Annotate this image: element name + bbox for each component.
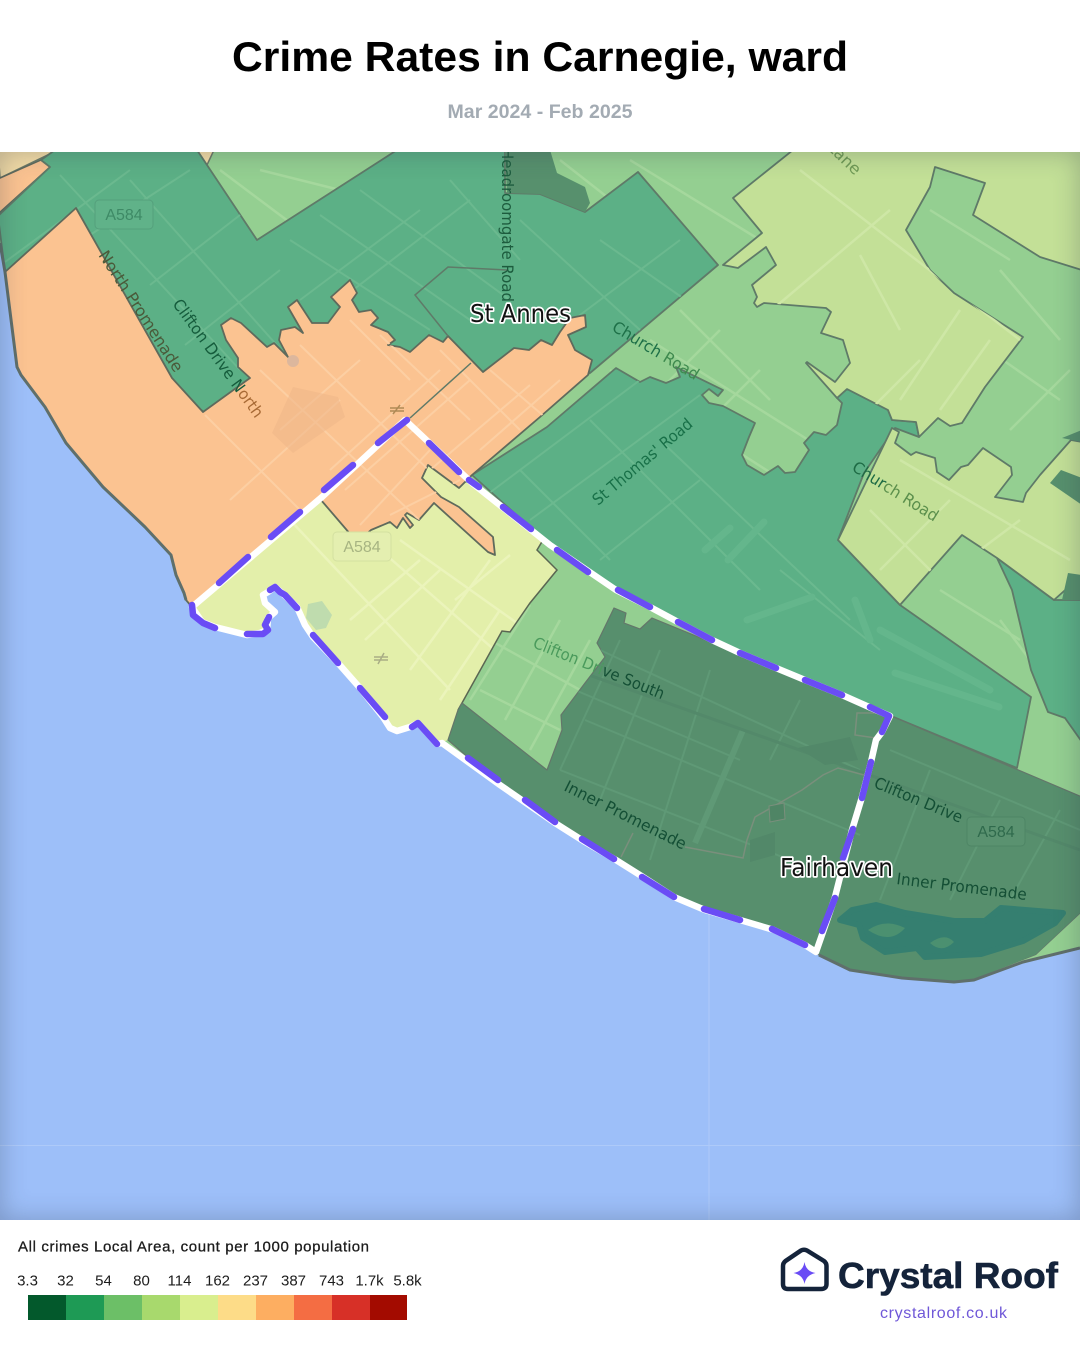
area: ward pale yellow bbox=[192, 465, 557, 744]
coastline bbox=[0, 243, 1080, 982]
lake islands bbox=[868, 923, 954, 948]
icon: house with star bbox=[783, 1250, 826, 1289]
shield: A584 north: A584 bbox=[105, 207, 143, 224]
label: Inner Promenade east: Inner Promenade bbox=[896, 869, 1028, 904]
legend scale numbers: 80 bbox=[133, 1272, 150, 1290]
shield: A584 east bbox=[967, 817, 1025, 846]
shield: A584 ward: A584 bbox=[343, 539, 381, 556]
legend title: All crimes Local Area, count per 1000 population bbox=[18, 1238, 369, 1256]
label: Clifton Drive North: Clifton Drive North bbox=[169, 295, 268, 421]
logo: Crystal Roof bbox=[783, 1250, 1059, 1322]
area: Fairhaven dark green bbox=[448, 608, 1080, 982]
legend scale numbers: 1.7k bbox=[355, 1272, 384, 1290]
area: north mid green bbox=[0, 152, 719, 411]
top-left orange patch bbox=[0, 160, 50, 214]
area: St Annes district outline bbox=[410, 267, 507, 418]
roads: north green bbox=[5, 170, 700, 370]
brand name: Crystal Roof bbox=[838, 1255, 1059, 1296]
place label: Fairhaven: Fairhaven bbox=[780, 853, 893, 882]
area: dark blob north bbox=[505, 150, 590, 212]
legend scale numbers: 5.8k bbox=[393, 1272, 422, 1290]
legend scale numbers: 743 bbox=[319, 1272, 344, 1290]
legend scale numbers: 54 bbox=[95, 1272, 112, 1290]
legend scale numbers: 32 bbox=[57, 1272, 74, 1290]
area: yellow-green north-east bbox=[723, 150, 1080, 437]
area: south-east light sliver bbox=[998, 914, 1080, 970]
roads: Fairhaven bbox=[560, 640, 1080, 900]
label: Headroomgate Road: Headroomgate Road bbox=[498, 148, 517, 302]
roads: orange bbox=[205, 320, 560, 540]
land base: light green areas bbox=[0, 152, 1080, 796]
map edge vignette bbox=[0, 152, 1080, 1220]
legend scale numbers: 387 bbox=[281, 1272, 306, 1290]
legend scale numbers: 162 bbox=[205, 1272, 230, 1290]
roads: pale ward bbox=[294, 524, 516, 700]
legend scale numbers bbox=[17, 1272, 422, 1290]
area: pale boundary east bbox=[458, 540, 557, 710]
rail icon: St Annes station bbox=[390, 405, 404, 414]
Fairhaven paths and blocks bbox=[621, 713, 880, 862]
sea tile seams bbox=[0, 915, 1080, 1220]
park in ward bbox=[306, 601, 332, 630]
roads: yellow-green Church Road block bbox=[870, 459, 1070, 572]
area: east mid green bbox=[997, 558, 1080, 742]
roads: south green and golf course bbox=[490, 380, 880, 650]
label: Lane: Lane bbox=[823, 137, 865, 179]
label: Church Road north: Church Road bbox=[609, 317, 703, 384]
roads: light green areas bbox=[220, 160, 1070, 750]
icon: town centre dot bbox=[287, 355, 299, 367]
place label: St Annes: St Annes bbox=[470, 299, 571, 328]
label: North Promenade: North Promenade bbox=[95, 247, 187, 375]
legend scale numbers: 3.3 bbox=[17, 1272, 38, 1290]
street labels bbox=[95, 137, 1028, 904]
shield: A584 north bbox=[95, 200, 153, 229]
area: town centre stipple bbox=[280, 393, 340, 448]
label: Church Road east: Church Road bbox=[849, 457, 942, 525]
area: south-of-church-road mid green bbox=[472, 367, 1031, 768]
label: Clifton Drive South: Clifton Drive South bbox=[531, 633, 667, 703]
label: St Thomas' Road: St Thomas' Road bbox=[588, 414, 696, 509]
lake bbox=[840, 905, 1063, 957]
legend colour swatches bbox=[28, 1295, 407, 1320]
legend bbox=[17, 1238, 422, 1320]
area: orange high-crime zone bbox=[5, 208, 592, 607]
roads: yellow-green north-east bbox=[760, 170, 1020, 420]
title: Crime Rates in Carnegie, ward bbox=[232, 33, 848, 80]
shield: A584 east: A584 bbox=[977, 824, 1015, 841]
legend scale numbers: 237 bbox=[243, 1272, 268, 1290]
area: dark patches on east edge bbox=[1050, 430, 1080, 600]
label: Clifton Drive east: Clifton Drive bbox=[871, 773, 966, 827]
subtitle: date range: Mar 2024 - Feb 2025 bbox=[448, 102, 633, 123]
sea bbox=[0, 152, 1080, 1220]
shield: A584 ward bbox=[333, 532, 391, 561]
rail icon: Ansdell station bbox=[374, 653, 388, 664]
top-left beige area bbox=[0, 150, 214, 178]
label: Inner Promenade west: Inner Promenade bbox=[561, 777, 690, 853]
area: yellow-green Church Road block bbox=[838, 428, 1080, 605]
ward boundary bbox=[192, 420, 890, 952]
legend scale numbers: 114 bbox=[168, 1272, 191, 1290]
road shields bbox=[95, 200, 1025, 846]
website: crystalroof.co.uk bbox=[880, 1305, 1008, 1322]
